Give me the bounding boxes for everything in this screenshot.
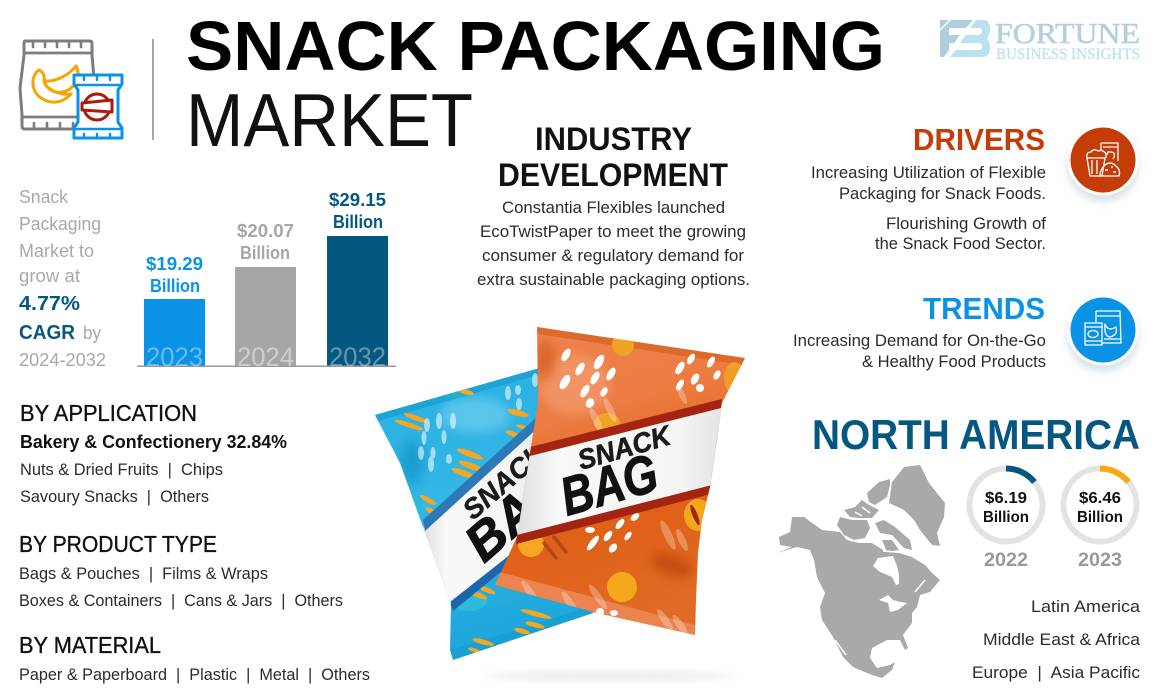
panel: by product type bbox=[19, 531, 343, 610]
bar chart: market size: Billion bbox=[150, 276, 200, 296]
bar chart: market size: $19.29 bbox=[146, 254, 203, 274]
text block: CAGR summary: Snack bbox=[19, 187, 69, 207]
panel: drivers: Flourishing Growth of bbox=[886, 214, 1046, 233]
text block: industry development: INDUSTRY bbox=[535, 121, 692, 157]
text block: other regions: Europe | Asia Pacific bbox=[972, 663, 1140, 682]
title: SNACK PACKAGING bbox=[186, 7, 885, 85]
panel: trends bbox=[793, 291, 1046, 371]
panel: trends: TRENDS bbox=[923, 291, 1045, 326]
text block: other regions: Latin America bbox=[1031, 597, 1141, 616]
illustration: orange snack bag bbox=[495, 327, 746, 637]
panel: by material bbox=[19, 632, 370, 684]
text block: industry development: EcoTwistPaper to meet the growing bbox=[480, 222, 746, 241]
bar chart: market size: $20.07 bbox=[237, 221, 294, 241]
panel: by product type: Boxes & Containers | Cans & Jars | Others bbox=[19, 591, 343, 610]
title: MARKET bbox=[186, 78, 473, 162]
icon: trends packs badge bbox=[1068, 294, 1138, 366]
icon: drivers snacks badge bbox=[1068, 124, 1138, 196]
donut chart: 2023: 2023 bbox=[1078, 550, 1122, 571]
donut chart: 2023: $6.46 bbox=[1079, 490, 1121, 507]
panel: drivers bbox=[811, 122, 1046, 253]
text block: CAGR summary: grow at bbox=[19, 266, 80, 286]
panel: by product type: BY PRODUCT TYPE bbox=[19, 531, 217, 557]
text block: industry development: extra sustainable packaging options. bbox=[477, 270, 750, 289]
panel: by product type: Bags & Pouches | Films & Wraps bbox=[19, 564, 268, 583]
donut chart: 2022: Billion bbox=[983, 509, 1029, 526]
text block: other regions bbox=[972, 597, 1141, 682]
text block: industry development: DEVELOPMENT bbox=[498, 157, 728, 193]
panel: trends: Increasing Demand for On-the-Go bbox=[793, 331, 1046, 350]
panel: by application bbox=[20, 400, 287, 506]
panel: drivers: Packaging for Snack Foods. bbox=[839, 184, 1046, 203]
text block: CAGR summary: Packaging bbox=[19, 214, 101, 234]
panel: by material: Paper & Paperboard | Plastic | Metal | Others bbox=[19, 665, 370, 684]
illustration: orange snack bag: BAG bbox=[554, 443, 665, 528]
donut chart: 2023: Billion bbox=[1077, 509, 1123, 526]
bar chart: market size: Billion bbox=[240, 243, 290, 263]
illustration: blue snack bag: SNACK bbox=[457, 436, 553, 526]
panel: by application: Nuts & Dried Fruits | Chips bbox=[20, 460, 223, 479]
panel: drivers: DRIVERS bbox=[913, 122, 1045, 157]
text block: CAGR summary bbox=[19, 187, 106, 370]
title bbox=[186, 7, 885, 162]
text block: CAGR summary: Market to bbox=[19, 241, 94, 261]
heading: north america: NORTH AMERICA bbox=[812, 411, 1140, 458]
illustration: orange snack bag: SNACK bbox=[574, 419, 676, 476]
divider line bbox=[152, 39, 154, 140]
map: north america bbox=[777, 465, 945, 678]
panel: by material: BY MATERIAL bbox=[19, 632, 161, 658]
bar chart: market size bbox=[137, 190, 396, 372]
panel: by application: Savoury Snacks | Others bbox=[20, 487, 209, 506]
panel: by application: Bakery & Confectionery 32.84% bbox=[20, 432, 287, 452]
logo: Fortune Business Insights: BUSINESS INSIGHTS bbox=[996, 46, 1140, 63]
donut chart: 2022 bbox=[970, 468, 1042, 571]
icon: snack packages bbox=[20, 41, 122, 138]
text block: CAGR summary: CAGR bbox=[19, 322, 76, 344]
text block: industry development: Constantia Flexibles launched bbox=[502, 198, 725, 217]
panel: drivers: the Snack Food Sector. bbox=[875, 234, 1046, 253]
panel: drivers: Increasing Utilization of Flexible bbox=[811, 163, 1046, 182]
panel: by application: BY APPLICATION bbox=[20, 400, 197, 426]
text block: other regions: Middle East & Africa bbox=[983, 630, 1141, 649]
bar chart: market size: Billion bbox=[333, 212, 383, 232]
bar chart: market size: $29.15 bbox=[329, 190, 386, 210]
donut chart: 2022: 2022 bbox=[984, 550, 1028, 571]
illustration: blue snack bag bbox=[375, 367, 600, 660]
bar chart: market size: 2032 bbox=[329, 342, 386, 372]
text block: CAGR summary: by bbox=[83, 323, 101, 343]
text block: industry development: consumer & regulatory demand for bbox=[482, 246, 744, 265]
logo: Fortune Business Insights bbox=[939, 18, 1140, 63]
bar chart: market size: 2024 bbox=[237, 342, 294, 372]
text block: CAGR summary: 2024-2032 bbox=[19, 350, 106, 370]
donut chart: 2023 bbox=[1064, 468, 1136, 571]
donut chart: 2022: $6.19 bbox=[985, 490, 1027, 507]
text block: industry development bbox=[477, 121, 750, 289]
bar chart: market size: 2023 bbox=[146, 342, 203, 372]
panel: trends: & Healthy Food Products bbox=[862, 352, 1046, 371]
logo: Fortune Business Insights: FORTUNE bbox=[995, 18, 1140, 50]
text block: CAGR summary: 4.77% bbox=[19, 293, 80, 315]
illustration: blue snack bag: BAG bbox=[454, 453, 579, 573]
shadow under bags bbox=[485, 673, 735, 679]
